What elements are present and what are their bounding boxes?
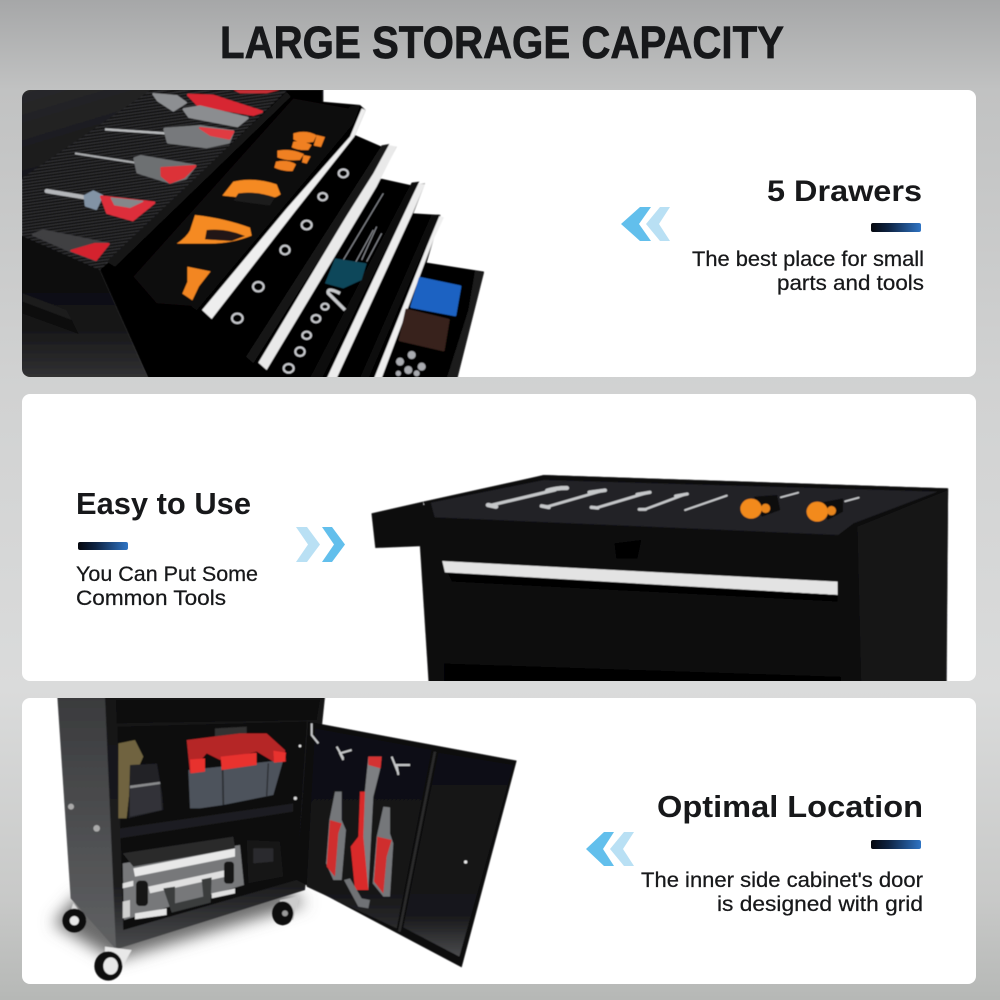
photo: open tool drawers (20, 88, 484, 378)
text block: easy to use description: You Can Put Some (76, 563, 258, 586)
text block: location description: is designed with grid (717, 893, 923, 916)
heading: Optimal Location: Optimal Location (657, 789, 923, 824)
panel: 5 drawers (20, 88, 976, 378)
text block: drawers description: parts and tools (777, 272, 924, 295)
icon: chevrons left (621, 207, 670, 241)
shelf (120, 803, 293, 838)
aluminium case (123, 837, 283, 920)
panel: easy to use (22, 394, 976, 687)
text block: drawers description: The best place for small (692, 248, 924, 271)
photo: cabinet with open door (53, 697, 517, 981)
tools on tray (488, 488, 859, 522)
photo: cabinet top with tools (371, 475, 948, 687)
casters (62, 897, 298, 981)
text block: location description (641, 869, 923, 916)
stored tool boxes (118, 727, 293, 920)
text block: location description: The inner side cabinet's door (641, 869, 923, 892)
heading: Easy to Use: Easy to Use (76, 486, 251, 521)
text block: drawers description (692, 248, 924, 295)
title: LARGE STORAGE CAPACITY (220, 17, 784, 68)
open door (294, 722, 517, 967)
panel: optimal location (22, 697, 976, 984)
heading: 5 Drawers: 5 Drawers (767, 175, 922, 208)
tools on top mat (33, 90, 280, 260)
text block: easy to use description: Common Tools (76, 587, 226, 610)
icon: chevrons left (586, 832, 634, 866)
icon: chevrons right (296, 527, 345, 562)
accent bar (871, 223, 921, 232)
accent bar (871, 840, 921, 849)
accent bar (78, 542, 128, 550)
drawer contents (177, 132, 460, 376)
text block: easy to use description (76, 563, 258, 610)
